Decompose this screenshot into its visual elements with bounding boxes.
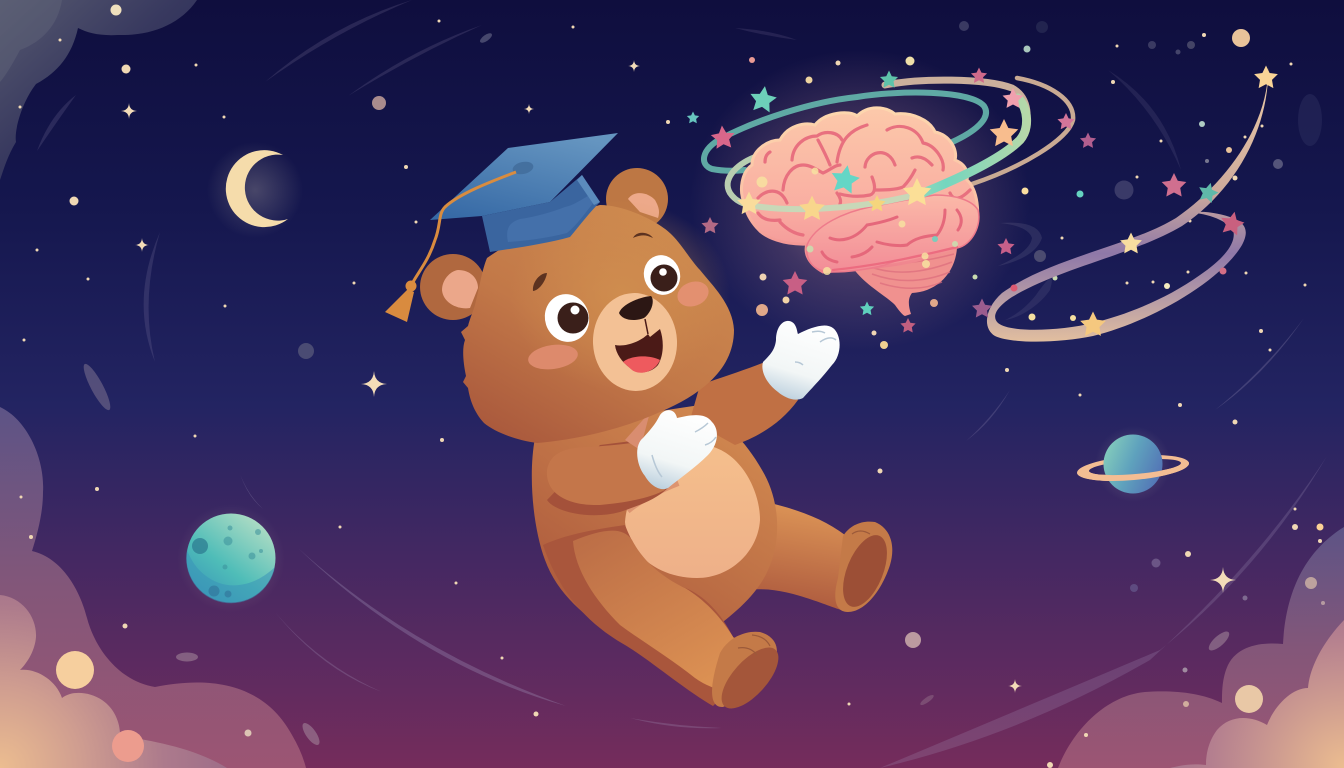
bear: left ear [420, 254, 486, 320]
sparkle stars [121, 60, 1236, 693]
bear: glove raised [762, 321, 840, 400]
large ribbon swirl with stars [972, 60, 1278, 342]
bear: nose [619, 296, 653, 320]
bear: glove on chest [637, 410, 717, 489]
orb: cream [1235, 685, 1263, 713]
bear: near arm across the chest [547, 412, 668, 515]
stars around the brain [687, 68, 1096, 332]
bear [385, 133, 896, 718]
brain: temporal lobe [807, 195, 979, 272]
orb: pink [112, 730, 144, 762]
brain: front ring across the lobes [755, 98, 1027, 209]
bear: belly [625, 445, 760, 578]
moon [207, 142, 303, 238]
bear: eyebrows [533, 233, 653, 291]
orb: peach [56, 651, 94, 689]
bear: muzzle [590, 291, 680, 393]
bear: cheek left [527, 342, 579, 372]
cloud: bottom left [0, 407, 306, 768]
bear: cheek right [674, 277, 712, 311]
bear: far arm raised [690, 362, 798, 445]
bear: head [461, 205, 734, 443]
bear: right ear [606, 168, 668, 230]
bear: left eye [539, 288, 595, 348]
cloud: top left [0, 0, 197, 180]
brain glow [690, 50, 1030, 350]
bear: tassel [385, 280, 416, 322]
brain: cerebellum and stem [853, 247, 957, 316]
brain: folds [758, 125, 970, 235]
orbit rings behind the brain [704, 78, 1073, 206]
bear: right eye [639, 250, 685, 300]
brain [741, 98, 1027, 316]
planet: teal cratered [177, 504, 285, 612]
brain: cerebrum [741, 108, 978, 272]
cloud: bottom right [1058, 527, 1344, 768]
planet: ringed [1077, 433, 1189, 495]
bear: graduation cap [412, 133, 618, 284]
bear: face shade highlight [510, 200, 730, 390]
bear: torso [532, 405, 777, 640]
bear: front leg and foot [543, 525, 788, 718]
bear: far leg and foot [720, 503, 896, 613]
bear: mouth [615, 319, 663, 373]
